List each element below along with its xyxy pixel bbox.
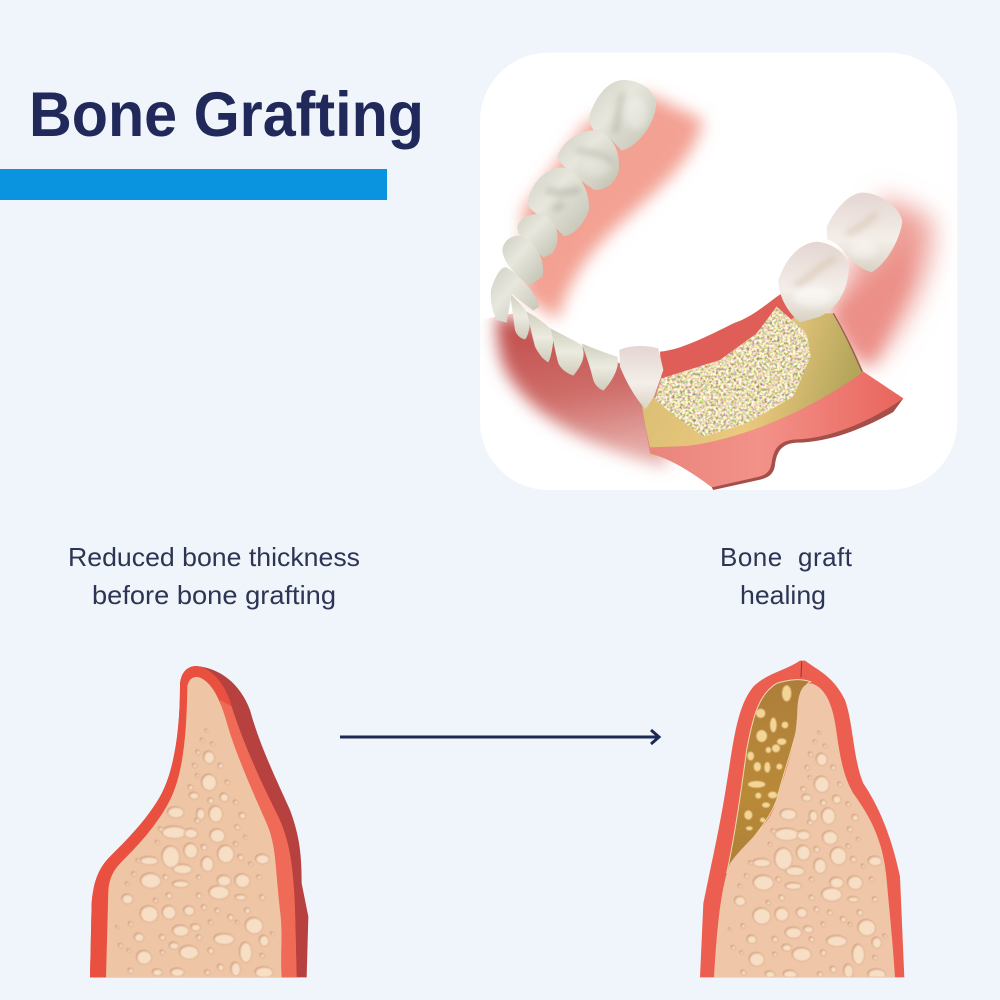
exposed yellow bone [642,313,863,460]
blue accent bar [0,169,387,200]
tooth: premolar beside graft [619,346,663,409]
gum outline [700,661,904,977]
flap dark lower edge [712,398,903,490]
bone body [106,677,282,977]
tooth: upper-left molar [588,80,656,151]
tooth: molar 2 [557,130,619,190]
lower gum flap [642,372,903,488]
diagram: bone before grafting [90,666,308,978]
tooth: right molar front [778,242,849,322]
tooth: premolar 2 [502,236,543,286]
flap edge over right gum [833,313,862,372]
gum inner lighter band [220,700,297,977]
caption: before grafting line 2: before bone grafting [92,580,336,610]
arrow [340,730,659,744]
right gum [827,197,932,367]
upper gum flap [660,293,800,383]
bone pores [728,731,887,980]
tooth: canine [491,267,539,323]
diagram: bone after graft healing [700,661,904,980]
right gum core [833,237,910,367]
back gum band left [523,93,703,320]
bone pores [115,729,274,978]
bone body [714,683,895,977]
panel: lower jaw illustration with bone graft [480,53,957,490]
image card [480,53,957,490]
graft granules [744,685,791,830]
tooth shading [547,93,878,307]
graft material [655,307,811,437]
tooth: incisor 3 [551,328,584,376]
gum main [90,666,297,977]
tooth: right molar back [827,193,902,272]
tooth: molar 3 [528,167,589,236]
lower left gum [497,313,667,467]
tooth: incisor 4 [582,343,618,391]
title: Bone Grafting [29,80,424,150]
outer gum dark side [90,666,308,977]
caption: before grafting: Reduced bone thickness [68,542,360,572]
caption: graft healing: Bone graft [720,542,853,572]
tooth: incisor 2 [527,312,554,362]
tooth: premolar 1 [517,214,558,257]
tooth: incisor 1 [510,293,530,339]
gum slit [799,661,803,677]
healing graft cavity [727,680,811,873]
caption: graft healing line 2: healing [740,580,826,610]
